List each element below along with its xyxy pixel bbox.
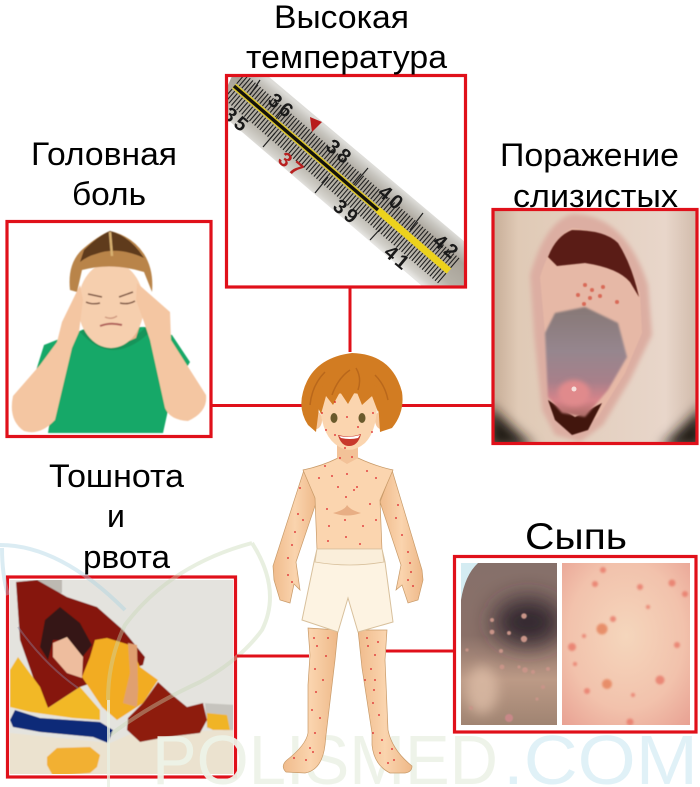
heading: nausea and vomiting: рвота: [83, 539, 170, 575]
child hair: [40, 607, 92, 660]
left skin photo: [461, 563, 557, 725]
thermometer body: [228, 76, 465, 286]
mattress: [8, 730, 236, 776]
red trousers: [127, 682, 207, 742]
temperature numbers: 40: [373, 181, 409, 216]
tongue: [545, 307, 627, 417]
temperature numbers: 36: [263, 89, 299, 124]
face: [78, 262, 144, 348]
heading: mucosa lesion: слизистых: [513, 178, 678, 214]
light skin patch: [466, 666, 498, 714]
eyes: [330, 413, 366, 423]
neck: [129, 327, 140, 342]
heading: high temperature: температура: [246, 39, 447, 75]
heading: nausea and vomiting: Тошнота: [49, 458, 184, 494]
temperature numbers: [228, 94, 458, 270]
wall shadow block: [37, 578, 62, 593]
watermark: leaf logo and site name: [0, 543, 698, 787]
heading: headache: боль: [72, 176, 146, 212]
thermometer frame: [226, 76, 466, 287]
right arm and hand: [136, 283, 206, 421]
mouth frame: [493, 210, 697, 444]
wall: [10, 580, 233, 743]
red pillow: [16, 580, 145, 708]
child face: [53, 637, 83, 678]
t-shirt: [30, 327, 190, 433]
arm: [123, 643, 138, 707]
ears: [310, 411, 322, 429]
pale corner: [461, 563, 478, 600]
rash dots: [287, 401, 414, 764]
tongue highlight: [572, 386, 576, 392]
boy torso: [303, 458, 393, 550]
hair fringe: [312, 378, 390, 414]
shorts waistband: [315, 549, 384, 565]
scale ticks: [228, 78, 456, 279]
headache frame: [7, 222, 211, 436]
heading: nausea and vomiting: и: [107, 498, 125, 534]
heading: nausea and vomiting: [49, 458, 184, 575]
yellow pillow: [10, 657, 100, 720]
belly mark: [333, 505, 361, 516]
temperature numbers: 39: [328, 195, 364, 230]
heading: rash: Сыпь: [525, 516, 627, 557]
cheek skin: [494, 210, 696, 442]
dark palate: [548, 230, 639, 297]
bumps: [465, 613, 550, 722]
boy legs: [283, 628, 412, 773]
red spots: [568, 567, 688, 726]
tongue tip colour: [558, 380, 590, 406]
heading: high temperature: Высокая: [274, 0, 409, 35]
blue pillow: [10, 710, 113, 743]
watermark leaf arcs: [0, 543, 270, 735]
floor step: [204, 703, 233, 730]
dark lower lip shadow: [548, 400, 602, 435]
hair: [70, 231, 152, 292]
smile: [338, 434, 361, 446]
mouth interior: [540, 228, 642, 433]
facial features: [86, 292, 135, 326]
rash frame: [454, 556, 696, 732]
temperature numbers: 38: [321, 135, 357, 170]
hair back: [301, 353, 403, 432]
shirt collar shading: [80, 327, 150, 350]
heading: headache: Головная: [31, 136, 177, 172]
connector lines: [212, 288, 492, 656]
lips: [530, 214, 652, 442]
face: [320, 393, 377, 450]
temperature numbers: 37: [273, 148, 309, 183]
temperature numbers: 42: [428, 230, 464, 265]
temperature numbers: 35: [218, 103, 254, 138]
panel: sick child lying on pillows: [8, 577, 236, 777]
neck: [337, 445, 358, 464]
yellow shirt: [82, 638, 158, 720]
heading: high temperature: [246, 0, 447, 75]
heading: mucosa lesion: [500, 137, 679, 214]
watermark stem: [107, 700, 110, 787]
left arm and hand: [12, 285, 83, 432]
red throat spots: [576, 283, 619, 306]
heading: headache: [31, 136, 177, 212]
bowl: [47, 747, 100, 776]
panel: thermometer (high temperature): [218, 76, 466, 287]
shorts: [302, 549, 393, 632]
red marker triangle: [310, 117, 322, 132]
mercury column: [234, 86, 378, 210]
vomiting photo frame: [8, 577, 236, 777]
panel: rash photos: [454, 556, 696, 732]
temperature numbers: 41: [379, 241, 415, 276]
central boy figure with rash: [273, 353, 423, 773]
dark chin corners: [488, 405, 700, 448]
yellow sock: [207, 713, 230, 730]
dark bruise: [494, 598, 562, 646]
hair shading: [310, 368, 388, 405]
heading: mucosa lesion: Поражение: [500, 137, 679, 173]
right skin photo: [562, 563, 690, 725]
boy arms and hands: [273, 470, 423, 603]
panel: mouth mucosa lesion: [488, 210, 700, 448]
panel: boy with headache: [7, 222, 211, 436]
